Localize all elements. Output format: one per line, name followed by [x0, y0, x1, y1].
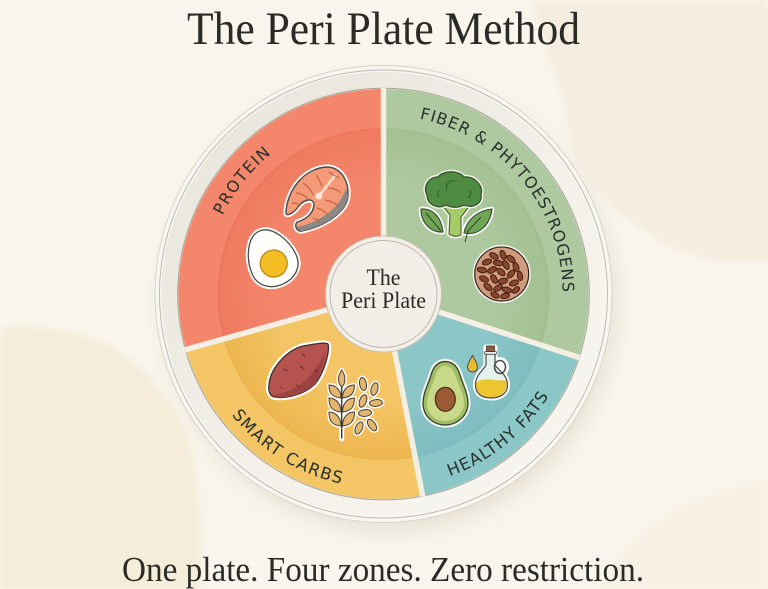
center circle: [326, 236, 442, 352]
panel: protein: [178, 89, 384, 349]
panel: fiber and phytoestrogens: [384, 89, 589, 357]
icon: oil bottle: [475, 346, 508, 398]
center text: Peri Plate: [341, 288, 426, 313]
icon: avocado: [423, 362, 468, 425]
label: smart carbs: SMART CARBS: [232, 409, 342, 483]
icon: boiled egg: [237, 221, 305, 294]
label: healthy fats: HEALTHY FATS: [446, 391, 547, 476]
icon: wheat: [329, 370, 383, 439]
label: fiber and phytoestrogens: FIBER & PHYTOESTROGENS: [421, 108, 574, 292]
panel: smart carbs: [186, 294, 422, 499]
center text: The: [366, 265, 400, 290]
label: protein: PROTEIN: [212, 146, 270, 214]
tagline: One plate. Four zones. Zero restriction.: [122, 550, 644, 589]
icon: flax seeds: [473, 245, 531, 303]
title: The Peri Plate Method: [187, 3, 580, 55]
icon: salmon: [286, 167, 348, 231]
icon: broccoli: [421, 172, 492, 242]
panel: healthy fats: [384, 294, 578, 495]
icon: oil drop: [468, 356, 478, 372]
plate: [155, 66, 615, 530]
icon: sweet potato: [269, 343, 328, 397]
